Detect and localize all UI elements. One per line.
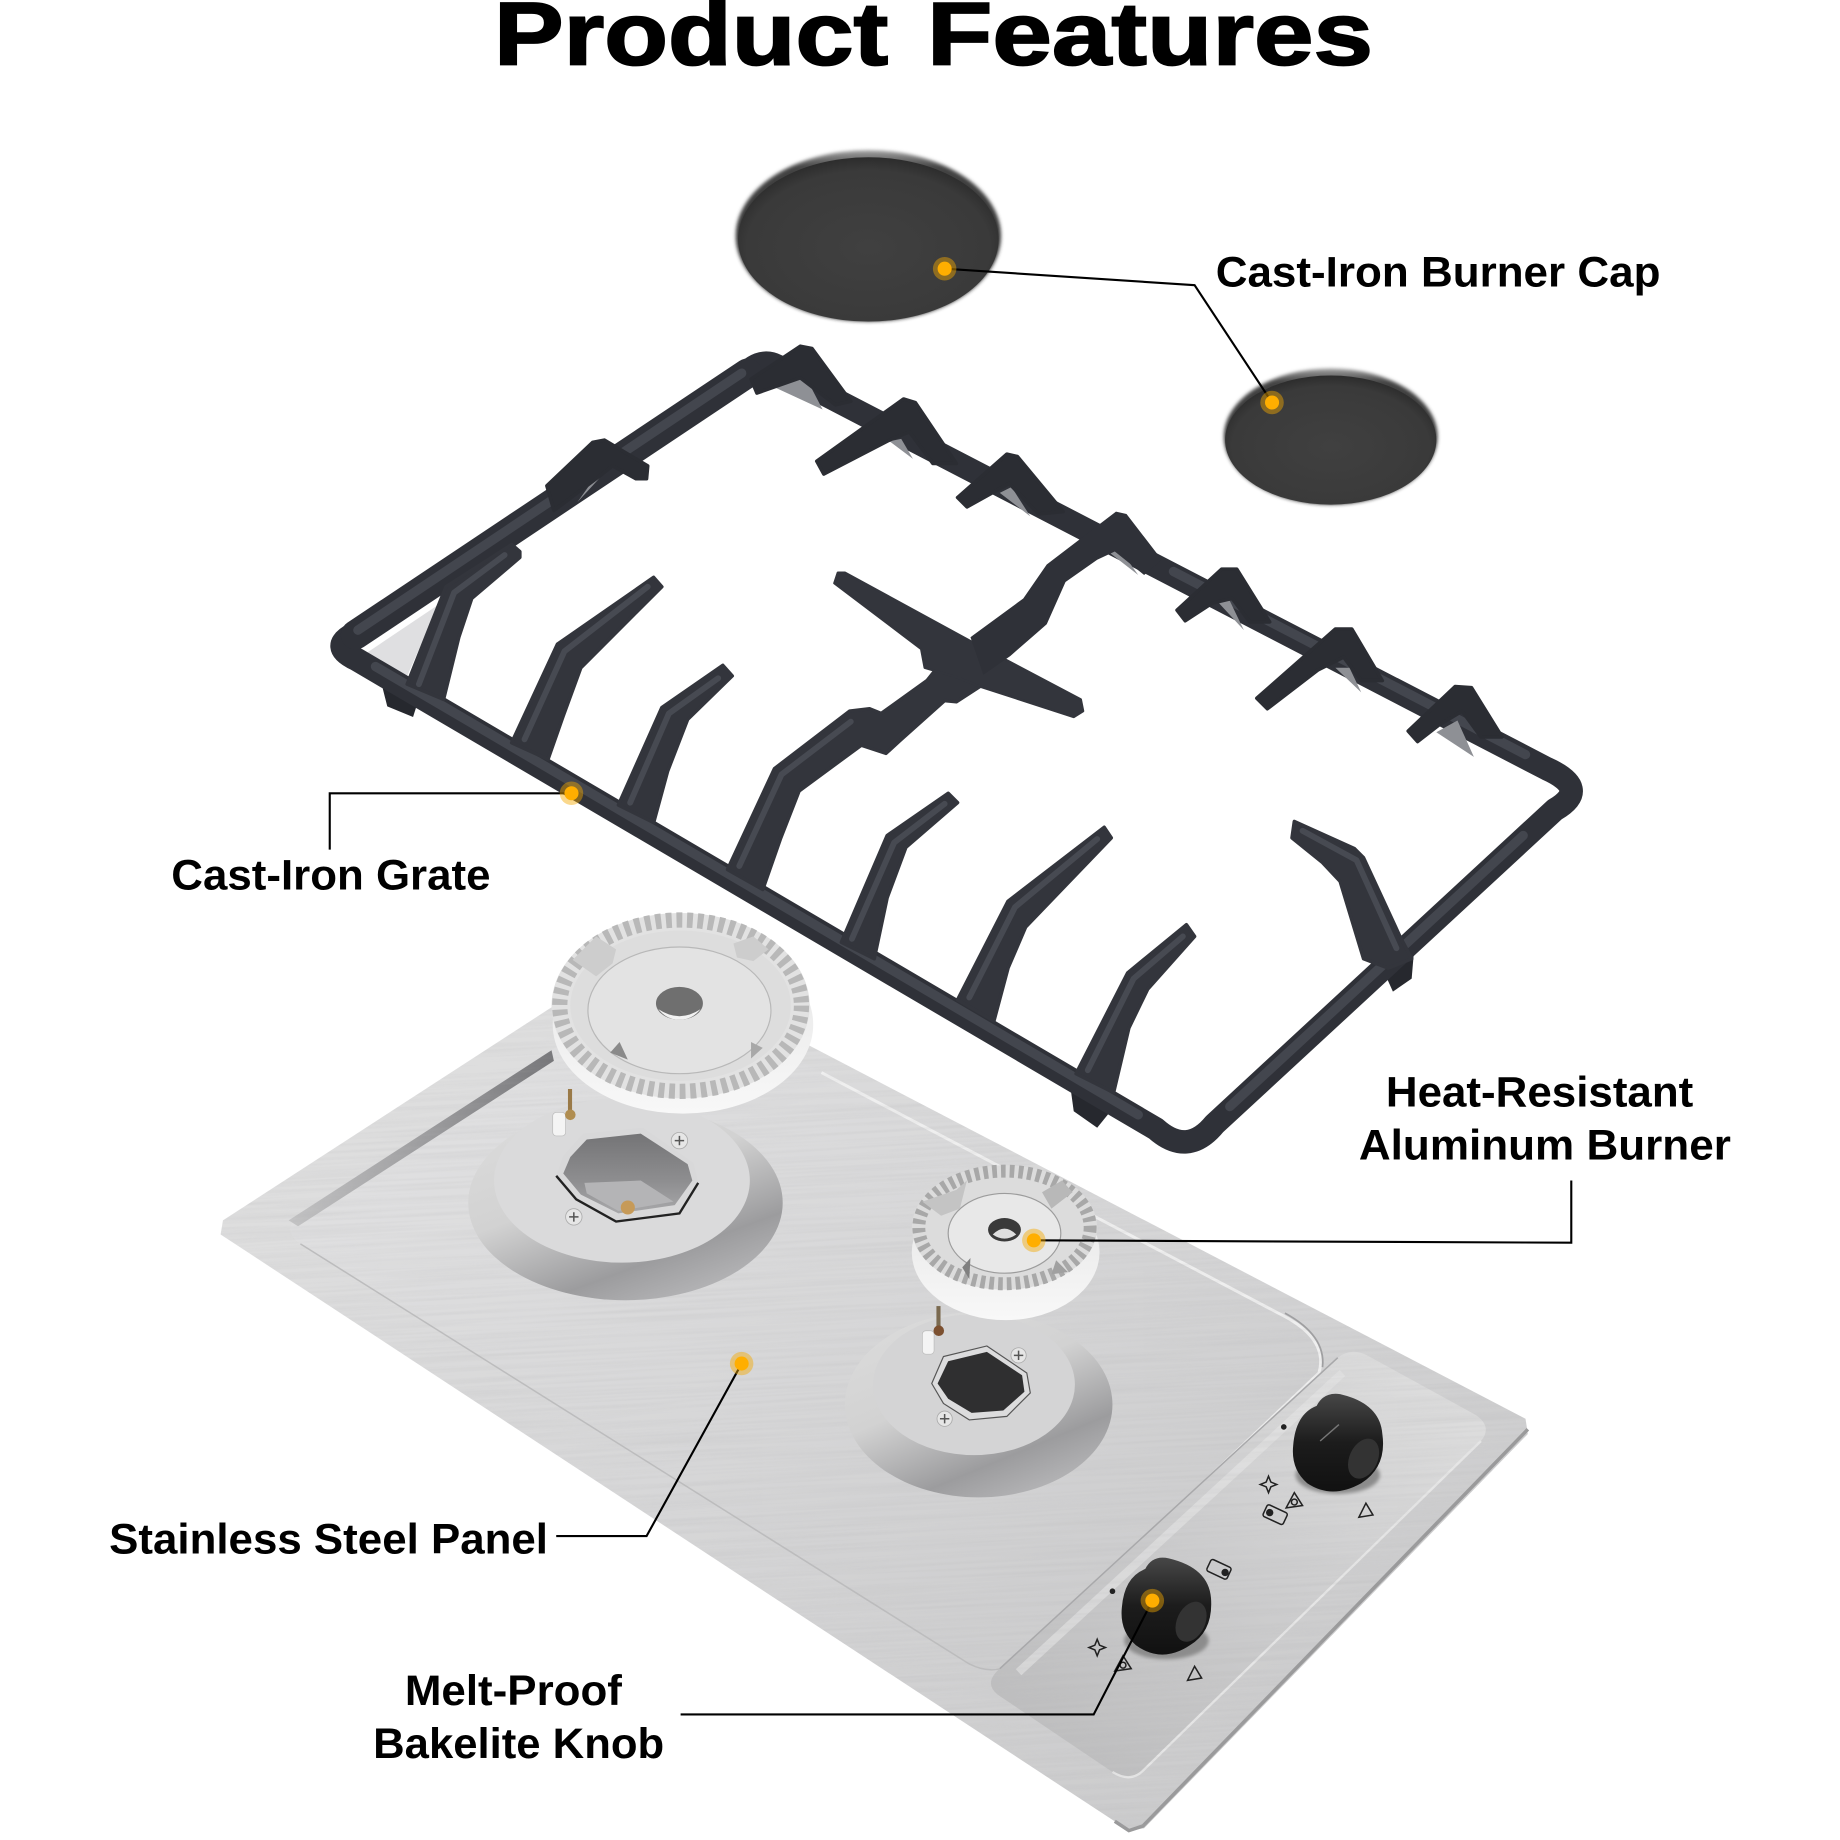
knob: upper — [1293, 1394, 1385, 1494]
burner ring: left — [468, 1098, 783, 1300]
marker dots — [560, 257, 1284, 1612]
brass nozzle — [621, 1200, 635, 1215]
brushed texture — [249, 1106, 1476, 1584]
burner ring: right — [845, 1312, 1112, 1497]
label: cast-iron grate: Cast-Iron Grate — [171, 851, 491, 898]
label: heat-resistant aluminum burner — [1359, 1069, 1731, 1168]
control markings — [1089, 1424, 1373, 1680]
front tines — [407, 544, 1412, 1092]
stainless steel panel — [220, 912, 1529, 1832]
frame — [342, 363, 1571, 1142]
gas opening: left — [553, 1089, 698, 1225]
title — [494, 0, 1373, 84]
thick back-left bar — [356, 373, 748, 635]
cooktop recess — [289, 983, 1323, 1670]
back tine — [970, 512, 1162, 675]
panel plate — [221, 954, 1528, 1831]
tine highlights — [419, 555, 1396, 1070]
label: melt-proof bakelite knob: Melt-Proof — [405, 1667, 623, 1714]
aluminum burner: large — [552, 913, 813, 1114]
label: stainless steel panel: Stainless Steel Panel — [109, 1516, 548, 1563]
label: cast-iron burner cap: Cast-Iron Burner Cap — [1216, 248, 1660, 295]
frame highlights — [358, 373, 1526, 1115]
knob: lower — [1122, 1558, 1213, 1659]
panel thickness edge — [1115, 1429, 1528, 1831]
aluminum burner: small — [912, 1165, 1100, 1320]
label: heat-resistant aluminum burner: Heat-Resistant — [1386, 1069, 1693, 1116]
burner cap: large — [736, 150, 1001, 322]
hub cross bar — [834, 573, 1083, 717]
leader line: grate — [330, 793, 571, 850]
label: melt-proof bakelite knob: Bakelite Knob — [373, 1720, 664, 1767]
gray webs — [577, 378, 1474, 757]
control strip — [991, 1352, 1486, 1777]
label: heat-resistant aluminum burner: Aluminum Burner — [1359, 1121, 1731, 1168]
leader line: aluminum burner — [1034, 1181, 1571, 1243]
leader line: burner cap — [945, 269, 1272, 402]
corner fill — [367, 604, 439, 676]
leader line: steel panel — [556, 1364, 742, 1536]
leader line: knob — [681, 1601, 1152, 1714]
burner cap: small — [1224, 368, 1438, 505]
cast-iron grate — [342, 346, 1571, 1142]
label: melt-proof bakelite knob — [373, 1667, 664, 1767]
screws — [671, 1132, 688, 1149]
back fingers — [547, 346, 1502, 742]
gas opening: right — [922, 1306, 1030, 1426]
igniter — [553, 1112, 566, 1136]
feet — [378, 669, 1414, 1128]
